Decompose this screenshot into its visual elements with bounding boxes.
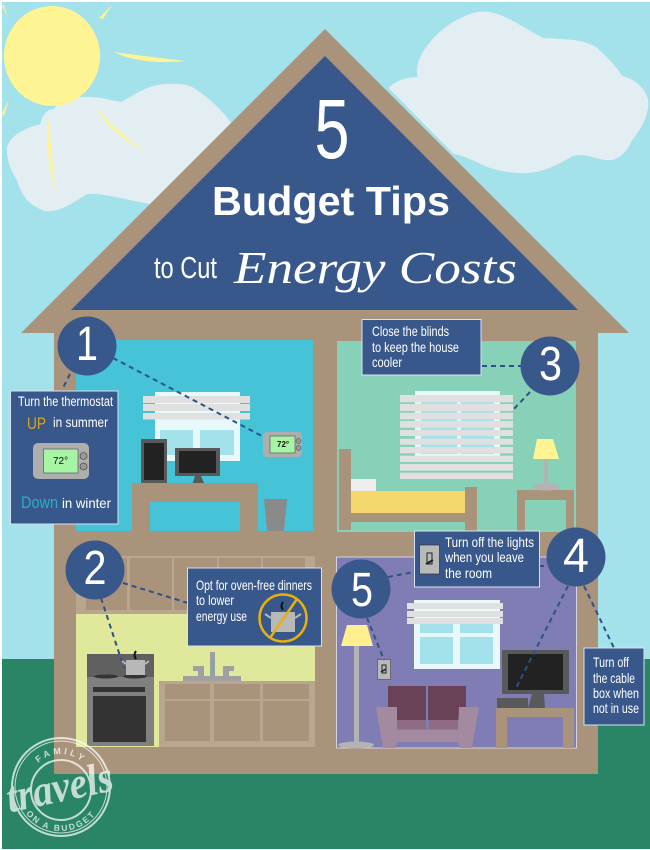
number badge 1: 1 (76, 318, 98, 371)
title: 5 (314, 82, 350, 176)
roof panel (71, 56, 578, 310)
window and blinds (400, 391, 513, 479)
title: Budget Tips (212, 178, 450, 224)
icon: light switch (420, 545, 440, 574)
icon: no pot (260, 594, 306, 642)
logo: Family Travels on a Budget: travels (2, 752, 117, 822)
stove (87, 654, 154, 746)
number badge 1 (58, 316, 116, 376)
window (143, 392, 250, 461)
dashed connectors (62, 358, 614, 690)
callout 4: cable box: Turn off (593, 654, 629, 670)
callout 2: oven-free dinners: Opt for oven-free dinners (196, 577, 312, 593)
callout 4: cable box: the cable (593, 670, 635, 686)
floor lamp (338, 625, 374, 748)
callout 5: lights (414, 531, 540, 587)
monitor (175, 448, 220, 485)
sky background (2, 2, 650, 660)
house body (54, 320, 598, 774)
desk (132, 483, 258, 531)
title: Energy Costs (233, 242, 517, 293)
number badge 3: 3 (539, 338, 562, 391)
sun (2, 5, 185, 190)
number badge 5 (332, 560, 390, 618)
callout 4: cable box (584, 648, 644, 725)
window (407, 600, 503, 669)
number badge 4 (546, 528, 606, 586)
room 3: bedroom (337, 341, 576, 532)
room 1: office (76, 340, 313, 531)
number badge 3 (520, 336, 580, 396)
callout 2: oven-free dinners: to lower (196, 592, 234, 608)
callout 3: blinds: cooler (372, 354, 402, 370)
callout 3: blinds (362, 320, 481, 375)
logo: Family Travels on a Budget (2, 737, 117, 837)
upper cabinets (76, 556, 315, 614)
sofa (376, 686, 479, 748)
table lamp (532, 439, 560, 490)
callout 2: oven-free dinners (188, 568, 322, 646)
television (502, 650, 569, 708)
computer tower (141, 439, 167, 483)
room 2: kitchen (76, 556, 315, 747)
number badge 2 (66, 540, 124, 600)
cable box (497, 698, 528, 708)
bed (339, 449, 477, 532)
cloud: right (390, 12, 647, 172)
roof (21, 29, 629, 333)
callout 2: oven-free dinners: energy use (196, 608, 247, 624)
number badge 2: 2 (84, 542, 106, 595)
side table (496, 708, 574, 748)
callout 3: blinds: to keep the house (372, 339, 459, 355)
number badge 4: 4 (563, 530, 589, 583)
callout 5: lights: when you leave (444, 549, 524, 565)
callout 1: thermostat: Turn the thermostat (18, 394, 113, 409)
small thermostat: 72° (277, 440, 289, 449)
title: to Cut (154, 250, 217, 285)
callout 1: thermostat: in winter (62, 495, 111, 511)
callout 1: thermostat (10, 391, 118, 524)
callout 1: thermostat: in summer (53, 414, 108, 430)
small thermostat (263, 432, 302, 457)
title (154, 82, 517, 293)
trash can (264, 499, 287, 531)
sink faucet (183, 652, 241, 681)
wall switch (378, 660, 390, 680)
ground (2, 659, 650, 849)
callout 1: thermostat: Down (21, 493, 58, 512)
room 5: living room (336, 557, 576, 748)
cooking pot on stove (122, 651, 149, 675)
callout 1: thermostat: UP (27, 414, 46, 433)
nightstand (517, 490, 574, 532)
large thermostat: 72° (53, 456, 68, 467)
callout 5: lights: the room (445, 565, 492, 581)
number badge 5: 5 (351, 564, 373, 617)
logo: Family Travels on a Budget: ON A BUDGET (27, 811, 94, 831)
callout 5: lights: Turn off the lights (445, 534, 534, 550)
cloud: left (8, 85, 230, 210)
callout 3: blinds: Close the blinds (372, 323, 449, 339)
logo: Family Travels on a Budget: FAMILY (35, 748, 85, 762)
base cabinets (159, 681, 315, 747)
